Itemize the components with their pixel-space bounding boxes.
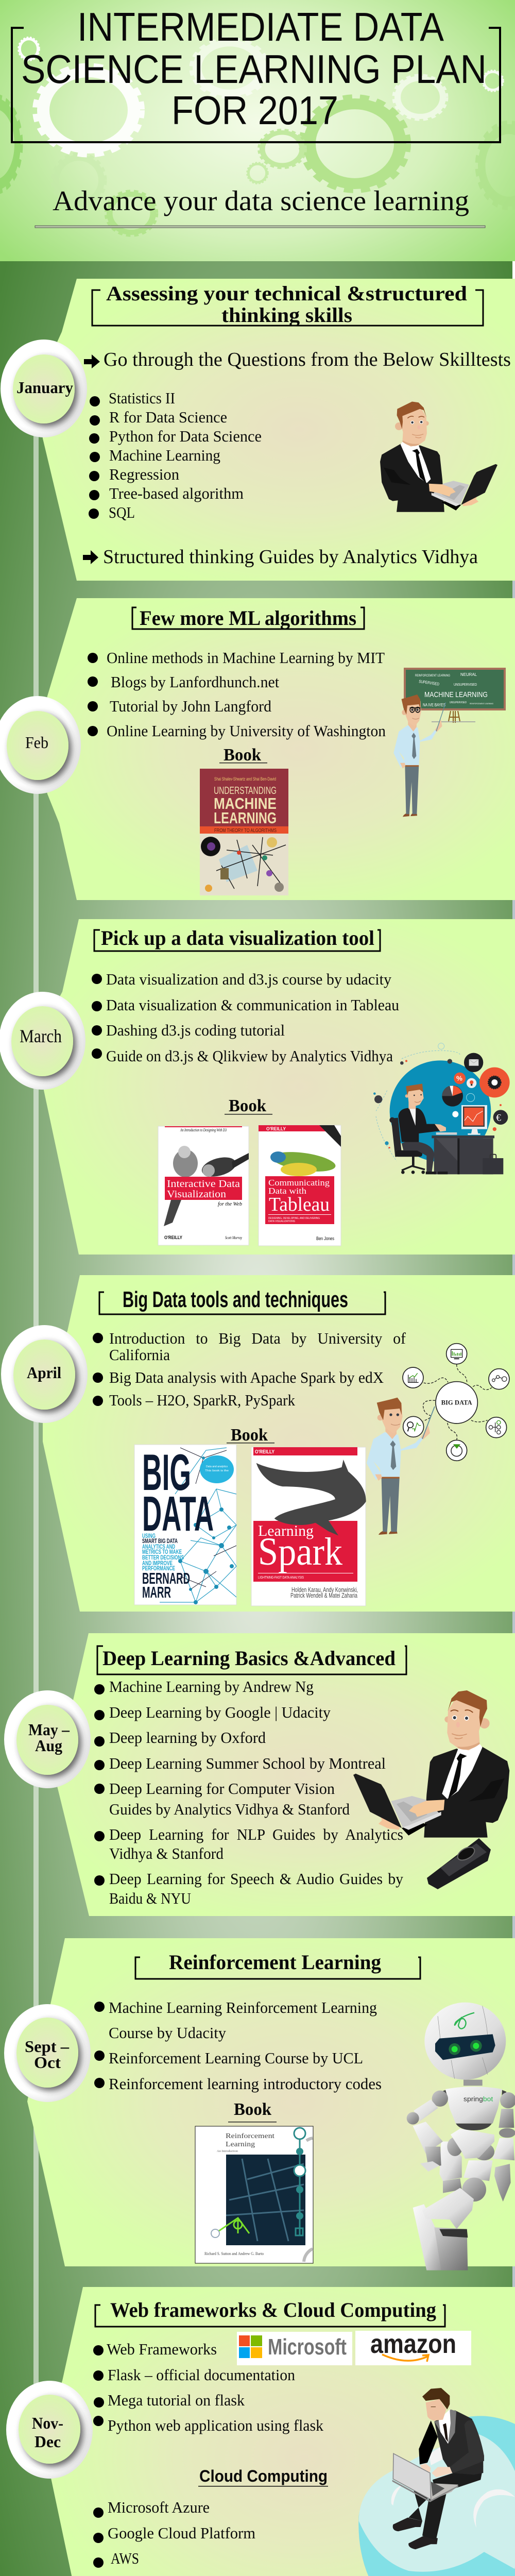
illustration: man with laptop [380,401,497,512]
skilltest list: SQL [109,503,135,521]
illustration: blackboard [404,668,506,723]
may-august list: Deep Learning for Speech & Audio Guides by [109,1870,403,1888]
february list: Online Learning by University of Washington [107,722,386,740]
january heading: Assessing your technical &structured [106,282,467,305]
january month badge: January [16,378,73,397]
may-august list: Vidhya & Stanford [109,1844,224,1862]
book cover: big data: BERNARD [142,1569,190,1587]
illustration: blackboard: NA IVE BAYES [423,703,445,707]
cloud computing list [93,2498,255,2568]
book cover: big data: AND IMPROVE [142,1560,173,1567]
panel: april [1,1275,515,1612]
logo: amazon: amazon [370,2329,456,2359]
illustration: blackboard: UNSUPERVISED [454,683,477,687]
march list: Data visualization & communication in Tableau [106,996,399,1014]
sept-oct month badge: Sept – [25,2037,70,2056]
arrow [84,354,100,368]
book cover: big data: ANALYTICS AND [142,1543,175,1550]
march month badge [0,992,85,1090]
skilltest list: Regression [109,465,179,483]
book cover: understanding machine learning: FROM THEORY TO ALGORITHMS [214,828,277,834]
skilltest list: Machine Learning [109,446,220,464]
sept-oct heading: Reinforcement Learning [169,1951,381,1974]
book cover: interactive data visualization: Scott Murray [225,1235,242,1240]
february heading: Few more ML algorithms [140,606,356,630]
book cover: reinforcement learning: An Introduction [217,2150,238,2153]
book cover: reinforcement learning: Richard S. Sutton and Andrew G. Barto [204,2251,264,2256]
book cover: understanding machine learning: MACHINE [214,794,277,812]
january heading: thinking skills [221,303,352,327]
february list: Online methods in Machine Learning by MIT [107,649,385,667]
title: INTERMEDIATE DATA [77,4,444,49]
cloud computing subheading: Cloud Computing [199,2467,328,2485]
sept-oct list: Machine Learning Reinforcement Learning [109,1998,377,2016]
cloud computing list: AWS [111,2549,139,2567]
illustration: man on cloud [358,2388,515,2576]
title [21,4,487,133]
sept-oct month badge: Oct [34,2053,61,2072]
panel: may to august [4,1633,515,1916]
book cover: big data [134,1444,236,1605]
book cover: big data: SMART BIG DATA [142,1537,178,1545]
skilltest list: Statistics II [109,389,175,407]
book label: Book [224,745,261,765]
march list: Guide on d3.js & Qlikview by Analytics Vidhya [106,1047,393,1065]
may-august list: Baidu & NYU [109,1889,191,1907]
may-august month badge: Aug [35,1736,62,1755]
book cover: understanding machine learning [200,769,288,895]
book cover: interactive data visualization: An Introduction to Designing With D3 [180,1128,227,1132]
illustration: man with laptop [353,1690,509,1838]
april list: Big Data analysis with Apache Spark by edX [109,1368,384,1386]
book cover: communicating data with tableau: DESIGNING, DEVELOPING, AND DELIVERING [268,1217,320,1220]
book cover: learning spark: O'REILLY [255,1449,274,1455]
skilltests intro: Go through the Questions from the Below Skilltests [104,349,511,370]
book cover: learning spark: Patrick Wendell & Matei Zaharia [290,1591,358,1599]
march list [92,970,399,1065]
book label: Book [229,1096,266,1115]
book cover: communicating data with tableau: Ben Jones [316,1236,334,1241]
sept-oct list [94,1998,382,2093]
illustration: analyst at desk [373,1043,510,1174]
may-august list: Deep Learning Summer School by Montreal [109,1754,386,1772]
web frameworks list: Python web application using flask [108,2416,323,2434]
book cover: big data: USING [142,1532,156,1539]
book cover: learning spark [251,1447,366,1606]
book cover: learning spark: LIGHTNING-FAST DATA ANALYSIS [258,1576,304,1580]
march list: Data visualization and d3.js course by udacity [106,970,391,988]
book cover: interactive data visualization: Interactive Data [167,1178,240,1190]
book cover: communicating data with tableau: Communicating [268,1178,330,1188]
book label: Book [234,2100,271,2119]
nov-dec month badge: Dec [35,2432,61,2451]
book cover: big data: BETTER DECISIONS [142,1554,184,1561]
skilltest list: Python for Data Science [109,427,262,445]
book cover: big data: This book is the [205,1469,229,1472]
nov-dec heading: Web frameworks & Cloud Computing [110,2298,436,2321]
book cover: big data: DATA [142,1486,214,1541]
book label: Book [231,1426,268,1445]
skilltest list: R for Data Science [109,408,227,426]
illustration: springbot robot: springbot [464,2095,493,2103]
book cover: big data: BIG [142,1444,191,1501]
book cover: big data: METRICS TO MAKE [142,1548,182,1555]
skilltest list [89,389,262,521]
january month badge [1,340,87,437]
sept-oct list: Reinforcement learning introductory codes [109,2075,382,2093]
book cover: reinforcement learning: Learning [226,2141,255,2148]
panel: february [0,598,515,900]
header background [0,0,515,261]
title frame [12,28,500,142]
diagram: big data hub: BIG DATA [441,1399,472,1406]
book cover: interactive data visualization [158,1126,249,1245]
book cover: big data: Data and analytics [206,1465,228,1468]
book cover: learning spark: Learning [258,1522,314,1539]
panel: march [0,919,515,1255]
nov-dec month badge [6,2381,93,2479]
book cover: learning spark: Holden Karau, Andy Konwinski, [291,1586,358,1594]
structured thinking guides: Structured thinking Guides by Analytics Vidhya [103,546,478,568]
april list: Tools – H2O, SparkR, PySpark [109,1391,295,1409]
illustration: blackboard: SUPERVISED [419,679,440,687]
may-august list: Deep Learning for Computer Vision [109,1780,335,1798]
web frameworks list: Mega tutorial on flask [108,2391,245,2409]
book cover: understanding machine learning: UNDERSTANDING [214,785,277,796]
web frameworks list [93,2340,323,2434]
logo: microsoft: Microsoft [268,2334,347,2360]
sept-oct heading [135,1951,420,1979]
book cover: reinforcement learning: Reinforcement [226,2132,274,2140]
illustration: teacher [393,694,445,817]
title: FOR 2017 [171,88,338,133]
illustration: analyst at desk: % [456,1075,462,1082]
illustration: presenter [367,1398,435,1535]
arrow [83,550,98,564]
book label [228,2100,277,2123]
panel: september to october [4,1938,515,2270]
logo: microsoft [237,2332,352,2365]
book cover: understanding machine learning: Shai Shalev-Shwartz and Shai Ben-David [214,776,276,782]
book cover: learning spark: Spark [258,1530,342,1573]
may-august list: Machine Learning by Andrew Ng [109,1677,314,1696]
book cover: understanding machine learning: LEARNING [214,809,277,827]
web frameworks list: Web Frameworks [107,2340,217,2358]
diagram: big data hub [403,1344,509,1461]
cloud computing list: Google Cloud Platform [108,2524,255,2542]
nov-dec month badge: Nov- [32,2414,63,2432]
illustration: springbot robot [407,2003,515,2270]
may-august list: Deep Learning by Google | Udacity [109,1703,331,1721]
february list: Blogs by Lanfordhunch.net [111,673,279,691]
book cover: communicating data with tableau: Tableau [269,1194,330,1215]
march month badge: March [20,1026,62,1046]
book cover: big data: PERFORMANCE [142,1565,175,1572]
april list: California [109,1346,170,1364]
book cover: reinforcement learning [195,2126,313,2263]
april month badge: April [27,1363,61,1382]
april heading: Big Data tools and techniques [123,1287,348,1312]
book cover: communicating data with tableau: DATA VISUALIZATIONS [268,1220,296,1223]
book cover: interactive data visualization: for the Web [218,1201,242,1207]
sept-oct list: Reinforcement Learning Course by UCL [109,2049,363,2067]
illustration: analyst at desk: € [496,1112,501,1123]
may-august heading: Deep Learning Basics &Advanced [102,1647,396,1670]
february list [88,649,386,740]
april month badge [1,1325,88,1423]
february list: Tutorial by John Langford [110,697,271,715]
february month badge [0,696,81,794]
book cover: interactive data visualization: Visualization [167,1189,226,1200]
may-august month badge: May – [28,1720,70,1739]
sept-oct list: Course by Udacity [109,2024,226,2042]
illustration: blackboard: NEURAL [460,672,477,677]
april list: Introduction to Big Data by University of [109,1329,406,1347]
panel: november to december [6,2287,515,2576]
subtitle: Advance your data science learning [53,185,469,216]
web frameworks list: Flask – official documentation [108,2366,295,2384]
illustration: blackboard: REINFORCEMENT LEARNING [415,674,450,677]
illustration: blackboard: UNSUPERVISED [450,701,467,704]
may-august list: Deep learning by Oxford [109,1728,266,1747]
may-august list [94,1677,403,1907]
march heading: Pick up a data visualization tool [101,926,374,950]
book cover: communicating data with tableau: O'REILLY [266,1126,286,1131]
illustration: blackboard: MACHINE LEARNING [424,690,488,699]
april list [93,1329,406,1409]
illustration: blackboard: REINFORCEMENT LEARNING [470,702,493,705]
may-august month badge [4,1690,91,1788]
february month badge: Feb [25,733,48,752]
panel: january [1,279,515,581]
skilltest list: Tree-based algorithm [109,484,244,502]
sept-oct month badge [4,2004,91,2102]
may-august list: Deep Learning for NLP Guides by Analytics [109,1825,403,1843]
cloud computing list: Microsoft Azure [108,2498,210,2516]
illustration: gpu card [427,1838,491,1889]
book cover: communicating data with tableau [259,1125,341,1246]
march list: Dashing d3.js coding tutorial [106,1021,285,1039]
may-august list: Guides by Analytics Vidhya & Stanford [109,1800,350,1818]
january heading [92,282,483,327]
book cover: interactive data visualization: O'REILLY [164,1235,182,1240]
book cover: communicating data with tableau: Data with [268,1186,307,1196]
book cover: big data: MARR [142,1583,171,1601]
